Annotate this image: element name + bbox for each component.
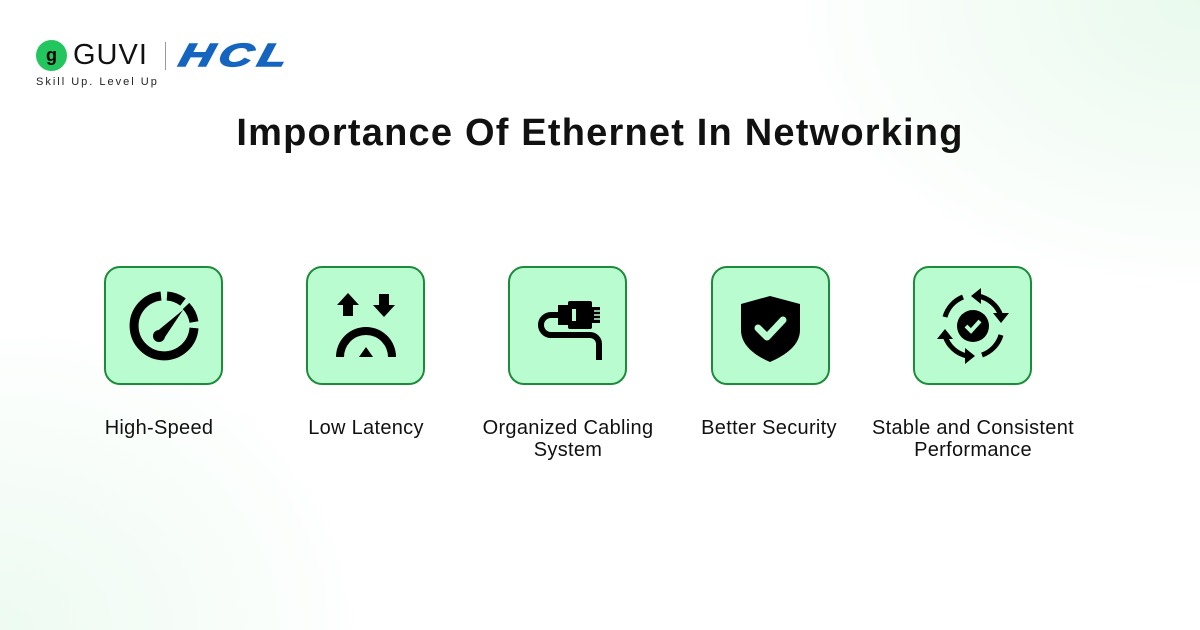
card: High-Speed (104, 266, 223, 385)
icon: arrows and gauge (337, 293, 359, 316)
label: Organized Cabling System: Organized Cabling (483, 417, 653, 439)
tagline: Skill Up. Level Up (36, 76, 159, 88)
card: Better Security (711, 266, 830, 385)
title: Importance Of Ethernet In Networking (236, 112, 964, 154)
logo (36, 37, 297, 88)
icon: shield check (741, 296, 800, 362)
label: Better Security: Better Security (701, 417, 837, 439)
label: Organized Cabling System: System (534, 439, 602, 461)
card: Organized Cabling (508, 266, 627, 385)
label: Stable and Consistent Performance (872, 417, 1074, 461)
card: Stable and Consistent (913, 266, 1032, 385)
icon: speedometer (134, 296, 194, 356)
hcl wordmark: HCL (176, 37, 297, 73)
card: Low Latency (306, 266, 425, 385)
label: Low Latency: Low Latency (308, 417, 424, 439)
icon: guvi circle (36, 40, 67, 71)
icon: cycle check (957, 310, 989, 342)
label: Stable and Consistent Performance: Stable and Consistent (872, 417, 1074, 439)
guvi wordmark: GUVI (73, 39, 148, 71)
icon: ethernet cable (541, 315, 599, 360)
label: Stable and Consistent Performance: Performance (914, 439, 1032, 461)
icon: guvi circle: g (46, 45, 57, 65)
label: Organized Cabling System (483, 417, 653, 461)
label: High-Speed: High-Speed (105, 417, 213, 439)
